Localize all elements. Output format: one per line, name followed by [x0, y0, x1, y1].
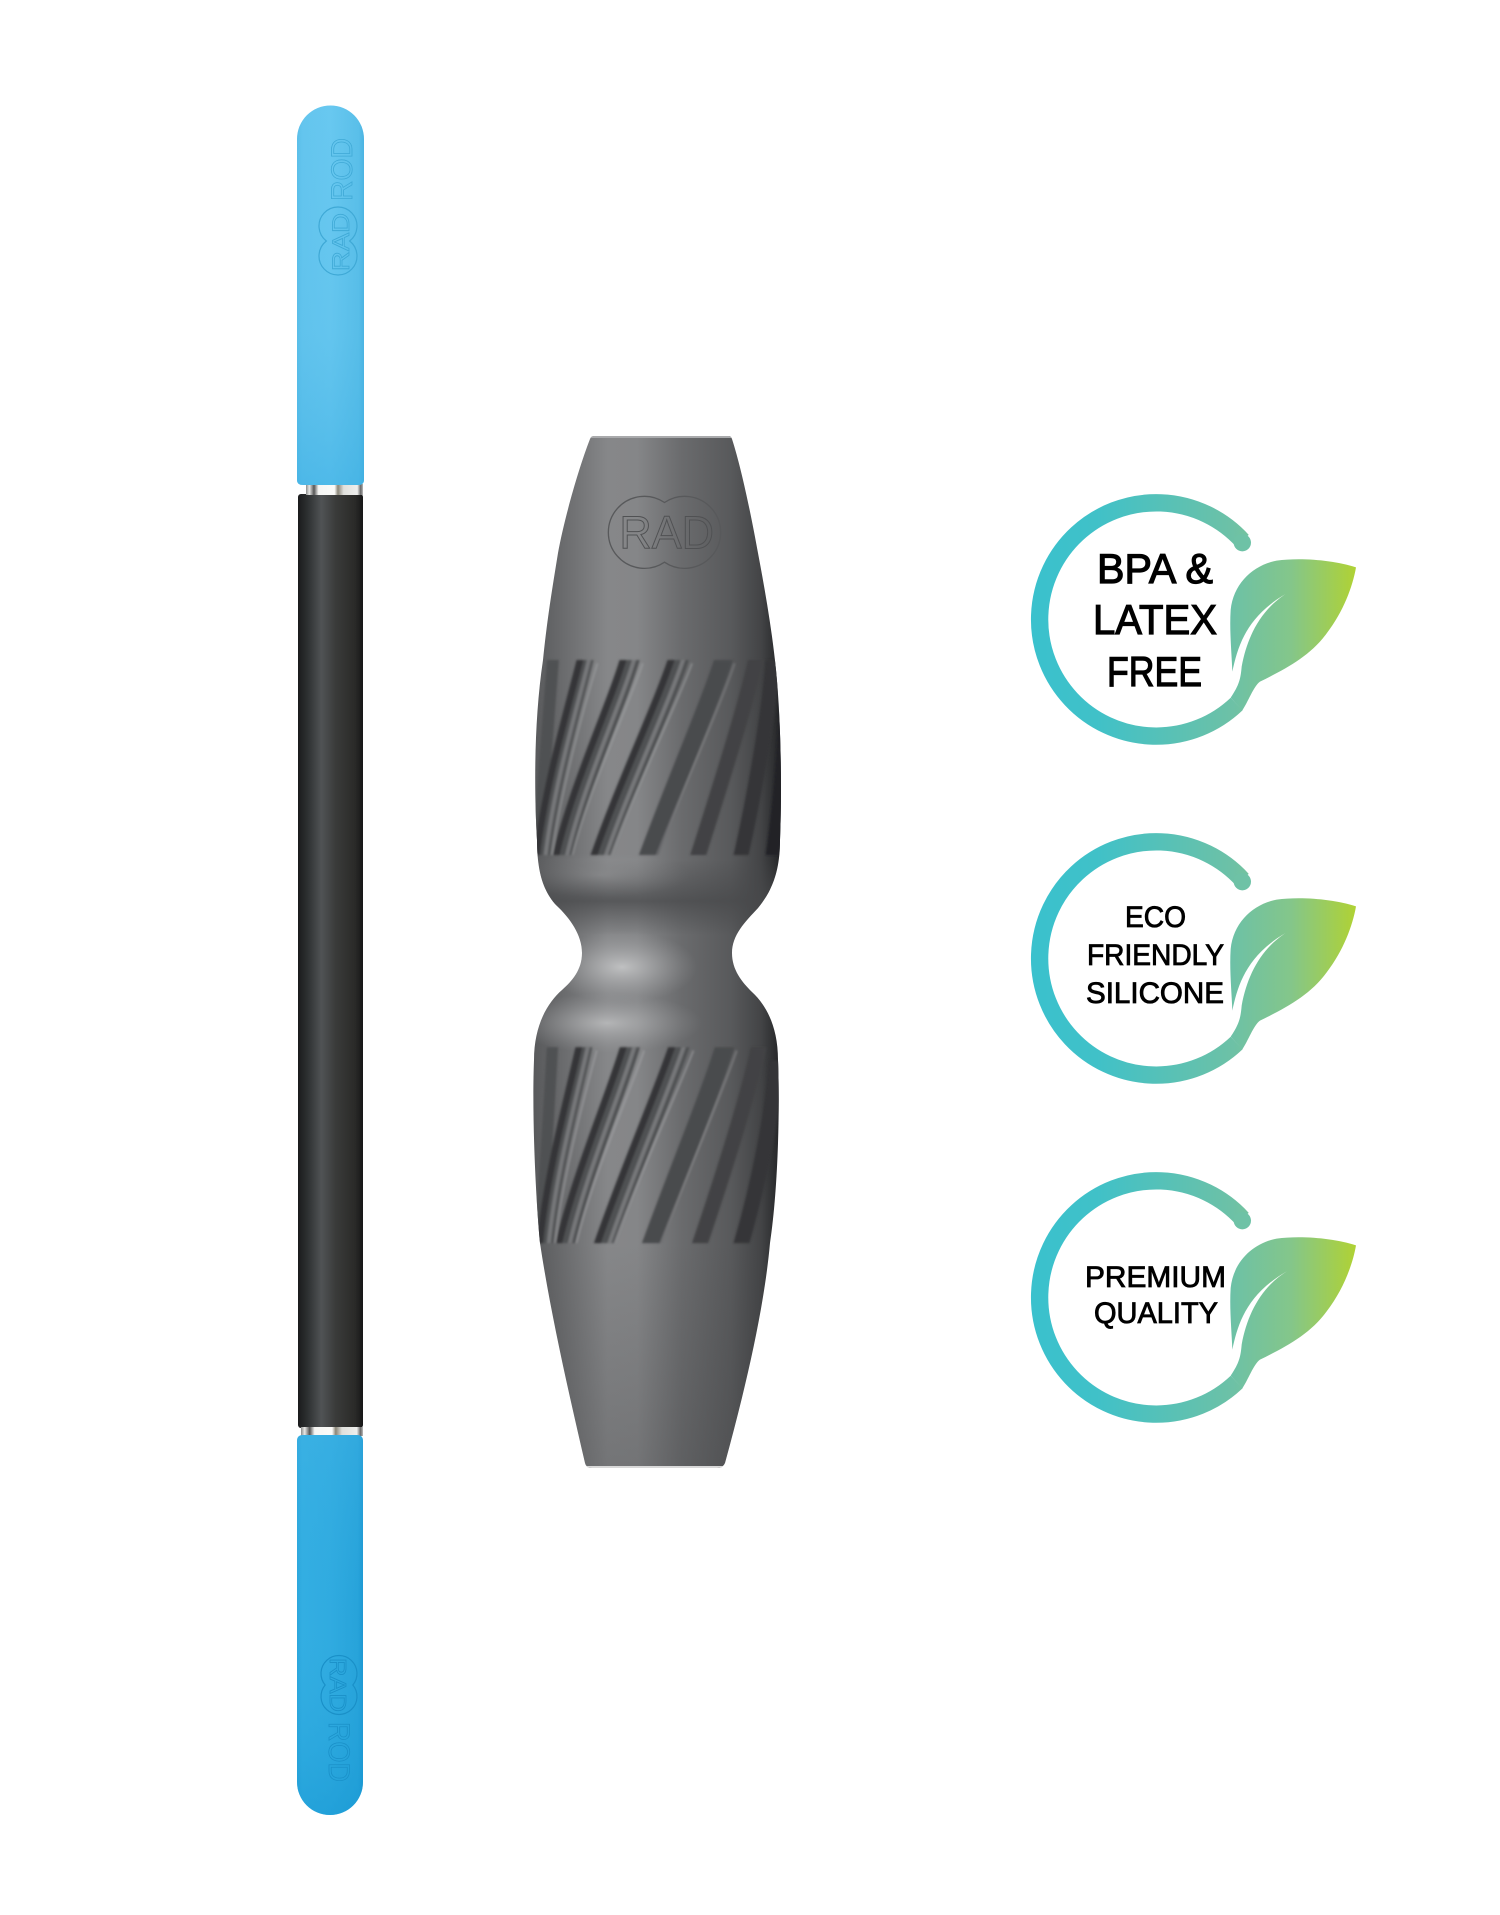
- BPA badge text: LATEX: [1093, 596, 1217, 643]
- massage rod: [297, 106, 364, 1815]
- rod lower metal collar: [301, 1427, 363, 1436]
- bottom cap embossed RAD ROD logo: [321, 1656, 357, 1782]
- bottom cap embossed RAD ROD logo: ROD: [322, 1722, 355, 1782]
- massage roller: [533, 436, 781, 1468]
- BPA badge text: [1093, 545, 1217, 695]
- badge: BPA and latex free: [1040, 503, 1356, 736]
- premium badge ring and leaf icon: [1040, 1181, 1356, 1414]
- top cap embossed RAD ROD logo: ROD: [326, 138, 359, 201]
- premium badge text: [1085, 1261, 1226, 1330]
- top cap embossed RAD ROD logo: [319, 138, 359, 275]
- eco badge text: ECO: [1125, 901, 1186, 934]
- upper ribbed grip grooves: [536, 653, 787, 860]
- BPA badge ring and leaf icon: [1040, 503, 1356, 736]
- BPA badge text: FREE: [1107, 648, 1202, 695]
- rod bottom blue cap: [297, 1435, 363, 1815]
- top cap embossed RAD ROD logo: RAD: [328, 213, 355, 271]
- eco badge text: SILICONE: [1086, 977, 1224, 1010]
- rod top blue cap: [297, 106, 364, 485]
- bottom cap embossed RAD ROD logo: RAD: [325, 1658, 351, 1712]
- rod black shaft: [298, 494, 363, 1428]
- eco badge text: FRIENDLY: [1087, 939, 1224, 972]
- BPA badge text: BPA &: [1097, 545, 1213, 592]
- roller RAD logo: [608, 496, 721, 568]
- eco badge text: [1086, 901, 1224, 1010]
- roller RAD logo: RAD: [619, 507, 714, 559]
- lower ribbed grip grooves: [539, 1040, 777, 1248]
- roller body: [525, 430, 790, 1475]
- rod upper metal collar: [306, 484, 363, 495]
- premium badge text: PREMIUM: [1085, 1261, 1226, 1294]
- badge: eco friendly silicone: [1040, 842, 1356, 1075]
- premium badge text: QUALITY: [1094, 1297, 1218, 1330]
- eco badge ring and leaf icon: [1040, 842, 1356, 1075]
- badge: premium quality: [1040, 1181, 1356, 1414]
- infographic canvas: [297, 106, 1356, 1815]
